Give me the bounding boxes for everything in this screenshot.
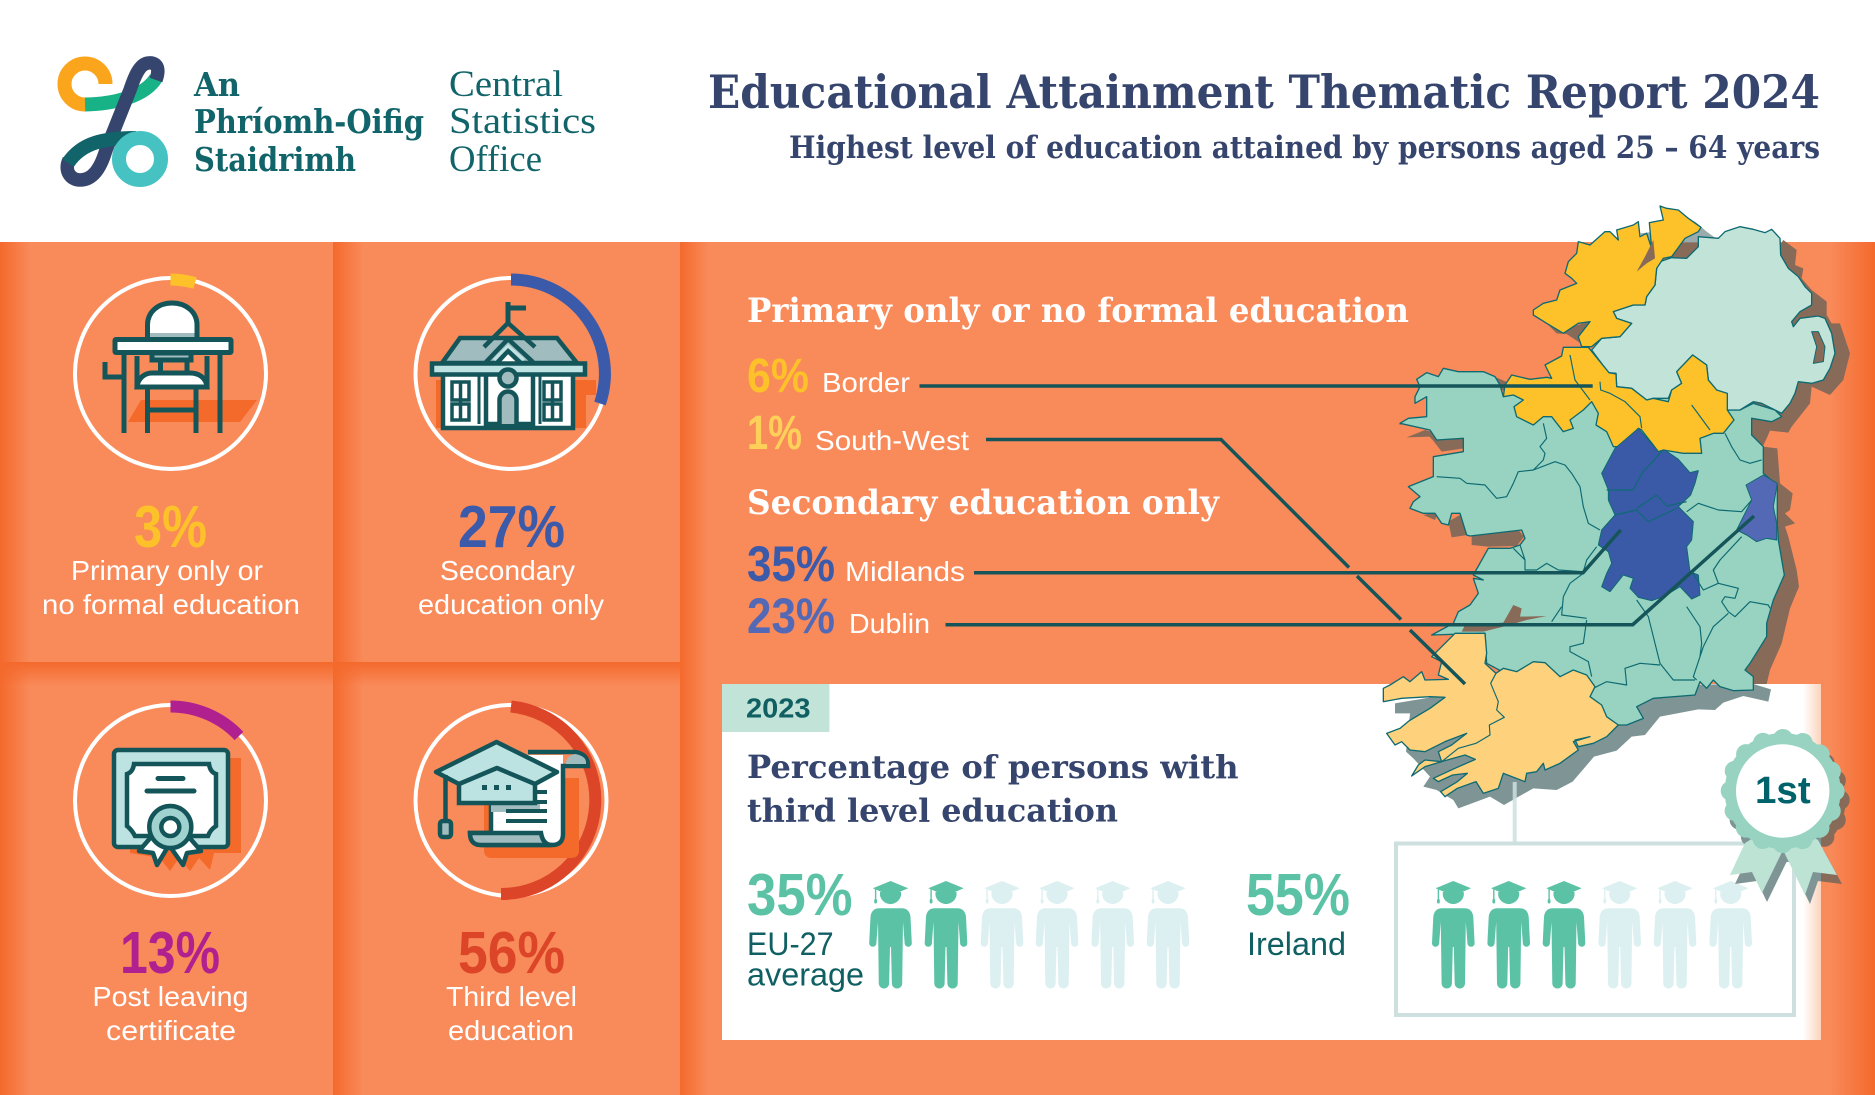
logo English name bbox=[449, 64, 596, 180]
stat: EU-27 average bbox=[747, 862, 864, 993]
stat: Dublin: Dublin bbox=[849, 608, 930, 639]
value 3%: 3% bbox=[134, 494, 207, 560]
logo English name: Office bbox=[449, 139, 542, 180]
stat: Border: Border bbox=[822, 367, 910, 398]
label secondary: education only bbox=[418, 589, 604, 620]
stat: South-West: 1% bbox=[747, 407, 802, 460]
value 13%: 13% bbox=[120, 920, 220, 986]
logo Irish name: Phríomh-Oifig bbox=[194, 102, 424, 141]
rosette centre bbox=[1736, 744, 1829, 838]
leader line: Dublin bbox=[946, 516, 1754, 625]
stat: Border bbox=[747, 350, 910, 403]
leader line: South-West bbox=[986, 440, 1465, 684]
icon: certificate bbox=[114, 750, 241, 871]
year tab bbox=[722, 684, 829, 732]
pictogram: Ireland persons bbox=[1432, 881, 1752, 988]
logo Irish name: Staidrimh bbox=[194, 140, 356, 179]
icon: school bbox=[432, 302, 596, 428]
rosette label: 1st bbox=[1755, 770, 1811, 812]
pictogram: EU-27 persons bbox=[869, 881, 1189, 988]
value 56%: 56% bbox=[458, 920, 565, 986]
box: Ireland highlight bbox=[1396, 844, 1794, 1015]
label secondary bbox=[418, 555, 604, 620]
label primary: Primary only or bbox=[71, 555, 263, 586]
stat: South-West: South-West bbox=[815, 425, 969, 456]
value 27%: 27% bbox=[458, 494, 565, 560]
icon: desk and chair bbox=[105, 303, 257, 433]
panel: primary only bbox=[42, 278, 300, 620]
label primary bbox=[42, 555, 300, 620]
label secondary: Secondary bbox=[440, 555, 575, 586]
stat: Ireland: Ireland bbox=[1247, 926, 1346, 962]
lough neagh bbox=[1812, 332, 1825, 363]
label third level: education bbox=[448, 1015, 574, 1046]
county boundaries south bbox=[1513, 500, 1770, 688]
ring 27% bbox=[416, 278, 606, 469]
ring 13% bbox=[75, 705, 266, 896]
stat: EU-27 average: EU-27 bbox=[747, 926, 834, 962]
label primary: no formal education bbox=[42, 589, 300, 620]
logo English name: Central bbox=[449, 64, 563, 105]
county boundaries north bbox=[1437, 355, 1762, 530]
lough swilly bbox=[1637, 240, 1655, 272]
heading: primary regions: Primary only or no formal education bbox=[747, 291, 1409, 331]
region: Border counties bbox=[1503, 347, 1734, 453]
stat: Border: 6% bbox=[747, 350, 809, 403]
panel: third level bbox=[416, 705, 606, 1046]
stat: South-West bbox=[747, 407, 969, 460]
region: South-West bbox=[1383, 633, 1618, 797]
map shadow: east coast bbox=[1703, 240, 1850, 684]
background band bbox=[0, 242, 1875, 1095]
region: Republic base (mint) bbox=[1400, 368, 1784, 725]
logo Irish name bbox=[193, 65, 424, 179]
stat: EU-27 average: 35% bbox=[747, 862, 853, 928]
rosette shadow bbox=[1730, 742, 1846, 904]
panel: 2023 white card bbox=[722, 684, 1821, 1040]
stat: Dublin bbox=[747, 588, 930, 644]
logo bbox=[64, 63, 596, 180]
ring 3% bbox=[75, 278, 266, 469]
icon: graduation cap and scroll bbox=[436, 742, 588, 858]
map shadow: north coast bbox=[1640, 218, 1718, 243]
rosette disc bbox=[1725, 733, 1841, 849]
logo symbol bbox=[64, 63, 161, 180]
logo English name: Statistics bbox=[449, 101, 596, 142]
label post leaving: certificate bbox=[106, 1015, 236, 1046]
region: Midlands bbox=[1598, 428, 1700, 601]
logo Irish name: An bbox=[193, 65, 240, 104]
ring 56% bbox=[416, 705, 606, 896]
estuary bbox=[1462, 605, 1547, 632]
panel: secondary bbox=[416, 278, 606, 620]
panel: post leaving bbox=[75, 705, 266, 1046]
stat: Midlands: Midlands bbox=[845, 556, 965, 587]
leader line: Midlands bbox=[974, 530, 1621, 573]
stat: Midlands bbox=[747, 536, 965, 592]
Kerry Cork boundary bbox=[1442, 673, 1504, 762]
leader line: Border bbox=[920, 384, 1593, 388]
stat: Ireland: 55% bbox=[1246, 862, 1350, 928]
stat: Midlands: 35% bbox=[747, 536, 835, 592]
label third level: Third level bbox=[446, 981, 577, 1012]
heading: third level percentage: Percentage of persons with bbox=[747, 748, 1238, 786]
stat: EU-27 average: average bbox=[747, 957, 864, 993]
label third level bbox=[446, 981, 577, 1046]
label post leaving bbox=[92, 981, 248, 1046]
region: Dublin bbox=[1737, 475, 1777, 542]
map shadow: Lough Foyle bbox=[1672, 242, 1700, 259]
rosette badge bbox=[1725, 733, 1846, 904]
ribbon tails bbox=[1730, 820, 1837, 895]
map shadow: south coast bbox=[1395, 684, 1771, 808]
map shadow: west bays bbox=[1398, 319, 1596, 647]
region: Donegal bbox=[1533, 206, 1701, 347]
label post leaving: Post leaving bbox=[92, 981, 248, 1012]
stat: Dublin: 23% bbox=[747, 588, 835, 644]
region: Northern Ireland bbox=[1592, 227, 1835, 413]
heading: third level percentage bbox=[747, 748, 1238, 830]
stat: Ireland bbox=[1246, 862, 1350, 962]
panel edges: left column shading bbox=[0, 242, 1875, 1095]
year tab: 2023 bbox=[746, 692, 810, 724]
map of Ireland bbox=[1395, 206, 1850, 808]
heading: secondary regions: Secondary education only bbox=[747, 483, 1220, 523]
map south bbox=[1383, 475, 1777, 797]
connector from map to box bbox=[1513, 782, 1517, 842]
heading: third level percentage: third level education bbox=[747, 792, 1118, 830]
